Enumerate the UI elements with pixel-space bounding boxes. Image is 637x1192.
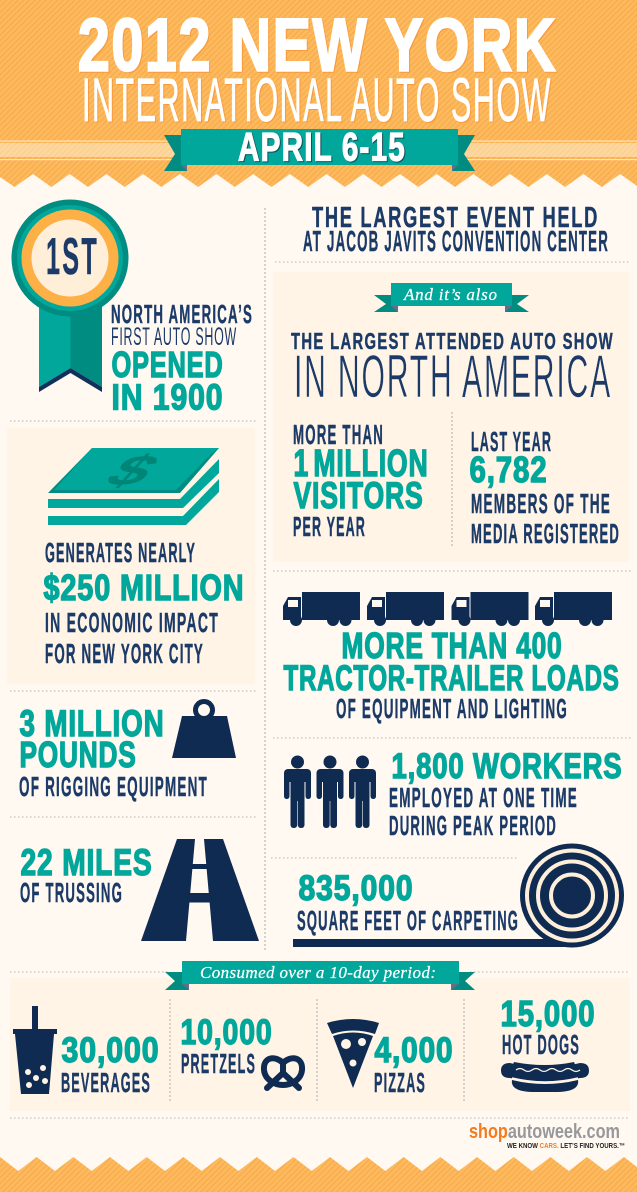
icon: road bbox=[141, 839, 259, 941]
stat: trussing bbox=[20, 842, 152, 908]
stat: visitors: VISITORS bbox=[294, 475, 424, 516]
heading: largest event bbox=[303, 202, 609, 258]
ribbon: consumed over a 10-day period: Consumed over a 10-day period: bbox=[200, 963, 436, 982]
panel: economic impact: GENERATES NEARLY bbox=[45, 537, 196, 568]
ribbon: consumed over a 10-day period bbox=[165, 961, 475, 990]
icon: stack of money: $ bbox=[92, 447, 173, 495]
stat: beverages: 30,000 bbox=[62, 1031, 160, 1070]
text: first auto show: NORTH AMERICA’S bbox=[111, 299, 253, 329]
icon: workers bbox=[284, 756, 376, 828]
stat: pretzels: 10,000 bbox=[180, 1013, 272, 1052]
stat: pizzas bbox=[374, 1031, 454, 1098]
text: first auto show: IN 1900 bbox=[112, 376, 224, 418]
stat: pretzels bbox=[180, 1013, 272, 1079]
panel: economic impact: IN ECONOMIC IMPACT bbox=[45, 607, 219, 638]
icon: first place ribbon medal: 1ST bbox=[46, 228, 99, 286]
icon: trucks bbox=[283, 592, 612, 626]
stat: trussing: 22 MILES bbox=[20, 842, 152, 883]
panel: largest attended bbox=[273, 272, 629, 562]
stat: tractor-trailer loads bbox=[284, 625, 620, 724]
panel: economic impact: $250 MILLION bbox=[44, 567, 244, 608]
text: first auto show bbox=[111, 299, 253, 418]
stat: rigging equipment bbox=[19, 703, 208, 802]
icon: beverage cup bbox=[13, 1006, 57, 1094]
icon: stack of money bbox=[48, 447, 219, 525]
date ribbon: APRIL 6-15 bbox=[238, 126, 406, 170]
icon: weight bbox=[172, 702, 236, 758]
logo: shopautoweek.com: WE KNOW CARS. LET’S FIND YOURS.™ bbox=[507, 1143, 625, 1150]
stat: visitors bbox=[293, 419, 428, 542]
panel: economic impact: FOR NEW YORK CITY bbox=[45, 638, 204, 669]
stat: tractor-trailer loads: MORE THAN 400 bbox=[342, 625, 562, 666]
stat: pretzels: PRETZELS bbox=[181, 1048, 256, 1079]
footer zigzag bbox=[0, 1157, 637, 1192]
text: first auto show: FIRST AUTO SHOW bbox=[111, 323, 237, 351]
stat: rigging equipment: POUNDS bbox=[20, 734, 136, 775]
stat: carpeting bbox=[297, 869, 519, 936]
ribbon: and it's also bbox=[374, 283, 529, 312]
title bbox=[78, 4, 557, 134]
icon: carpet roll bbox=[293, 844, 624, 948]
panel: economic impact bbox=[7, 428, 255, 684]
stat: trussing: OF TRUSSING bbox=[20, 877, 123, 908]
header banner bbox=[0, 0, 637, 189]
text: first auto show: OPENED bbox=[112, 344, 224, 385]
stat: rigging equipment: 3 MILLION bbox=[20, 703, 164, 744]
stat: carpeting: 835,000 bbox=[298, 869, 414, 908]
stat: visitors: PER YEAR bbox=[293, 511, 366, 542]
stat: media: 6,782 bbox=[470, 449, 548, 490]
icon: hot dog bbox=[501, 1062, 589, 1092]
ribbon: and it's also: And it’s also bbox=[403, 285, 497, 304]
stat: visitors: MORE THAN bbox=[293, 419, 384, 450]
stat: beverages bbox=[61, 1031, 160, 1098]
text: OF RIGGING EQUIPMENT bbox=[19, 771, 208, 802]
icon: first place ribbon medal bbox=[12, 200, 128, 392]
stat: hot dogs bbox=[500, 993, 596, 1060]
icon: pretzel bbox=[264, 1058, 302, 1088]
stat: pizzas: 4,000 bbox=[374, 1031, 454, 1070]
panel: consumed: BEVERAGES bbox=[61, 1067, 151, 1098]
stat: hot dogs: 15,000 bbox=[500, 993, 596, 1034]
dotted dividers bbox=[10, 208, 631, 1118]
icon: pizza slice bbox=[327, 1019, 379, 1088]
stat: workers bbox=[389, 747, 622, 841]
stat: media bbox=[470, 426, 620, 549]
stat: visitors: 1 MILLION bbox=[294, 443, 428, 485]
panel: consumed bbox=[10, 978, 630, 1111]
stat: pizzas: PIZZAS bbox=[374, 1067, 426, 1098]
